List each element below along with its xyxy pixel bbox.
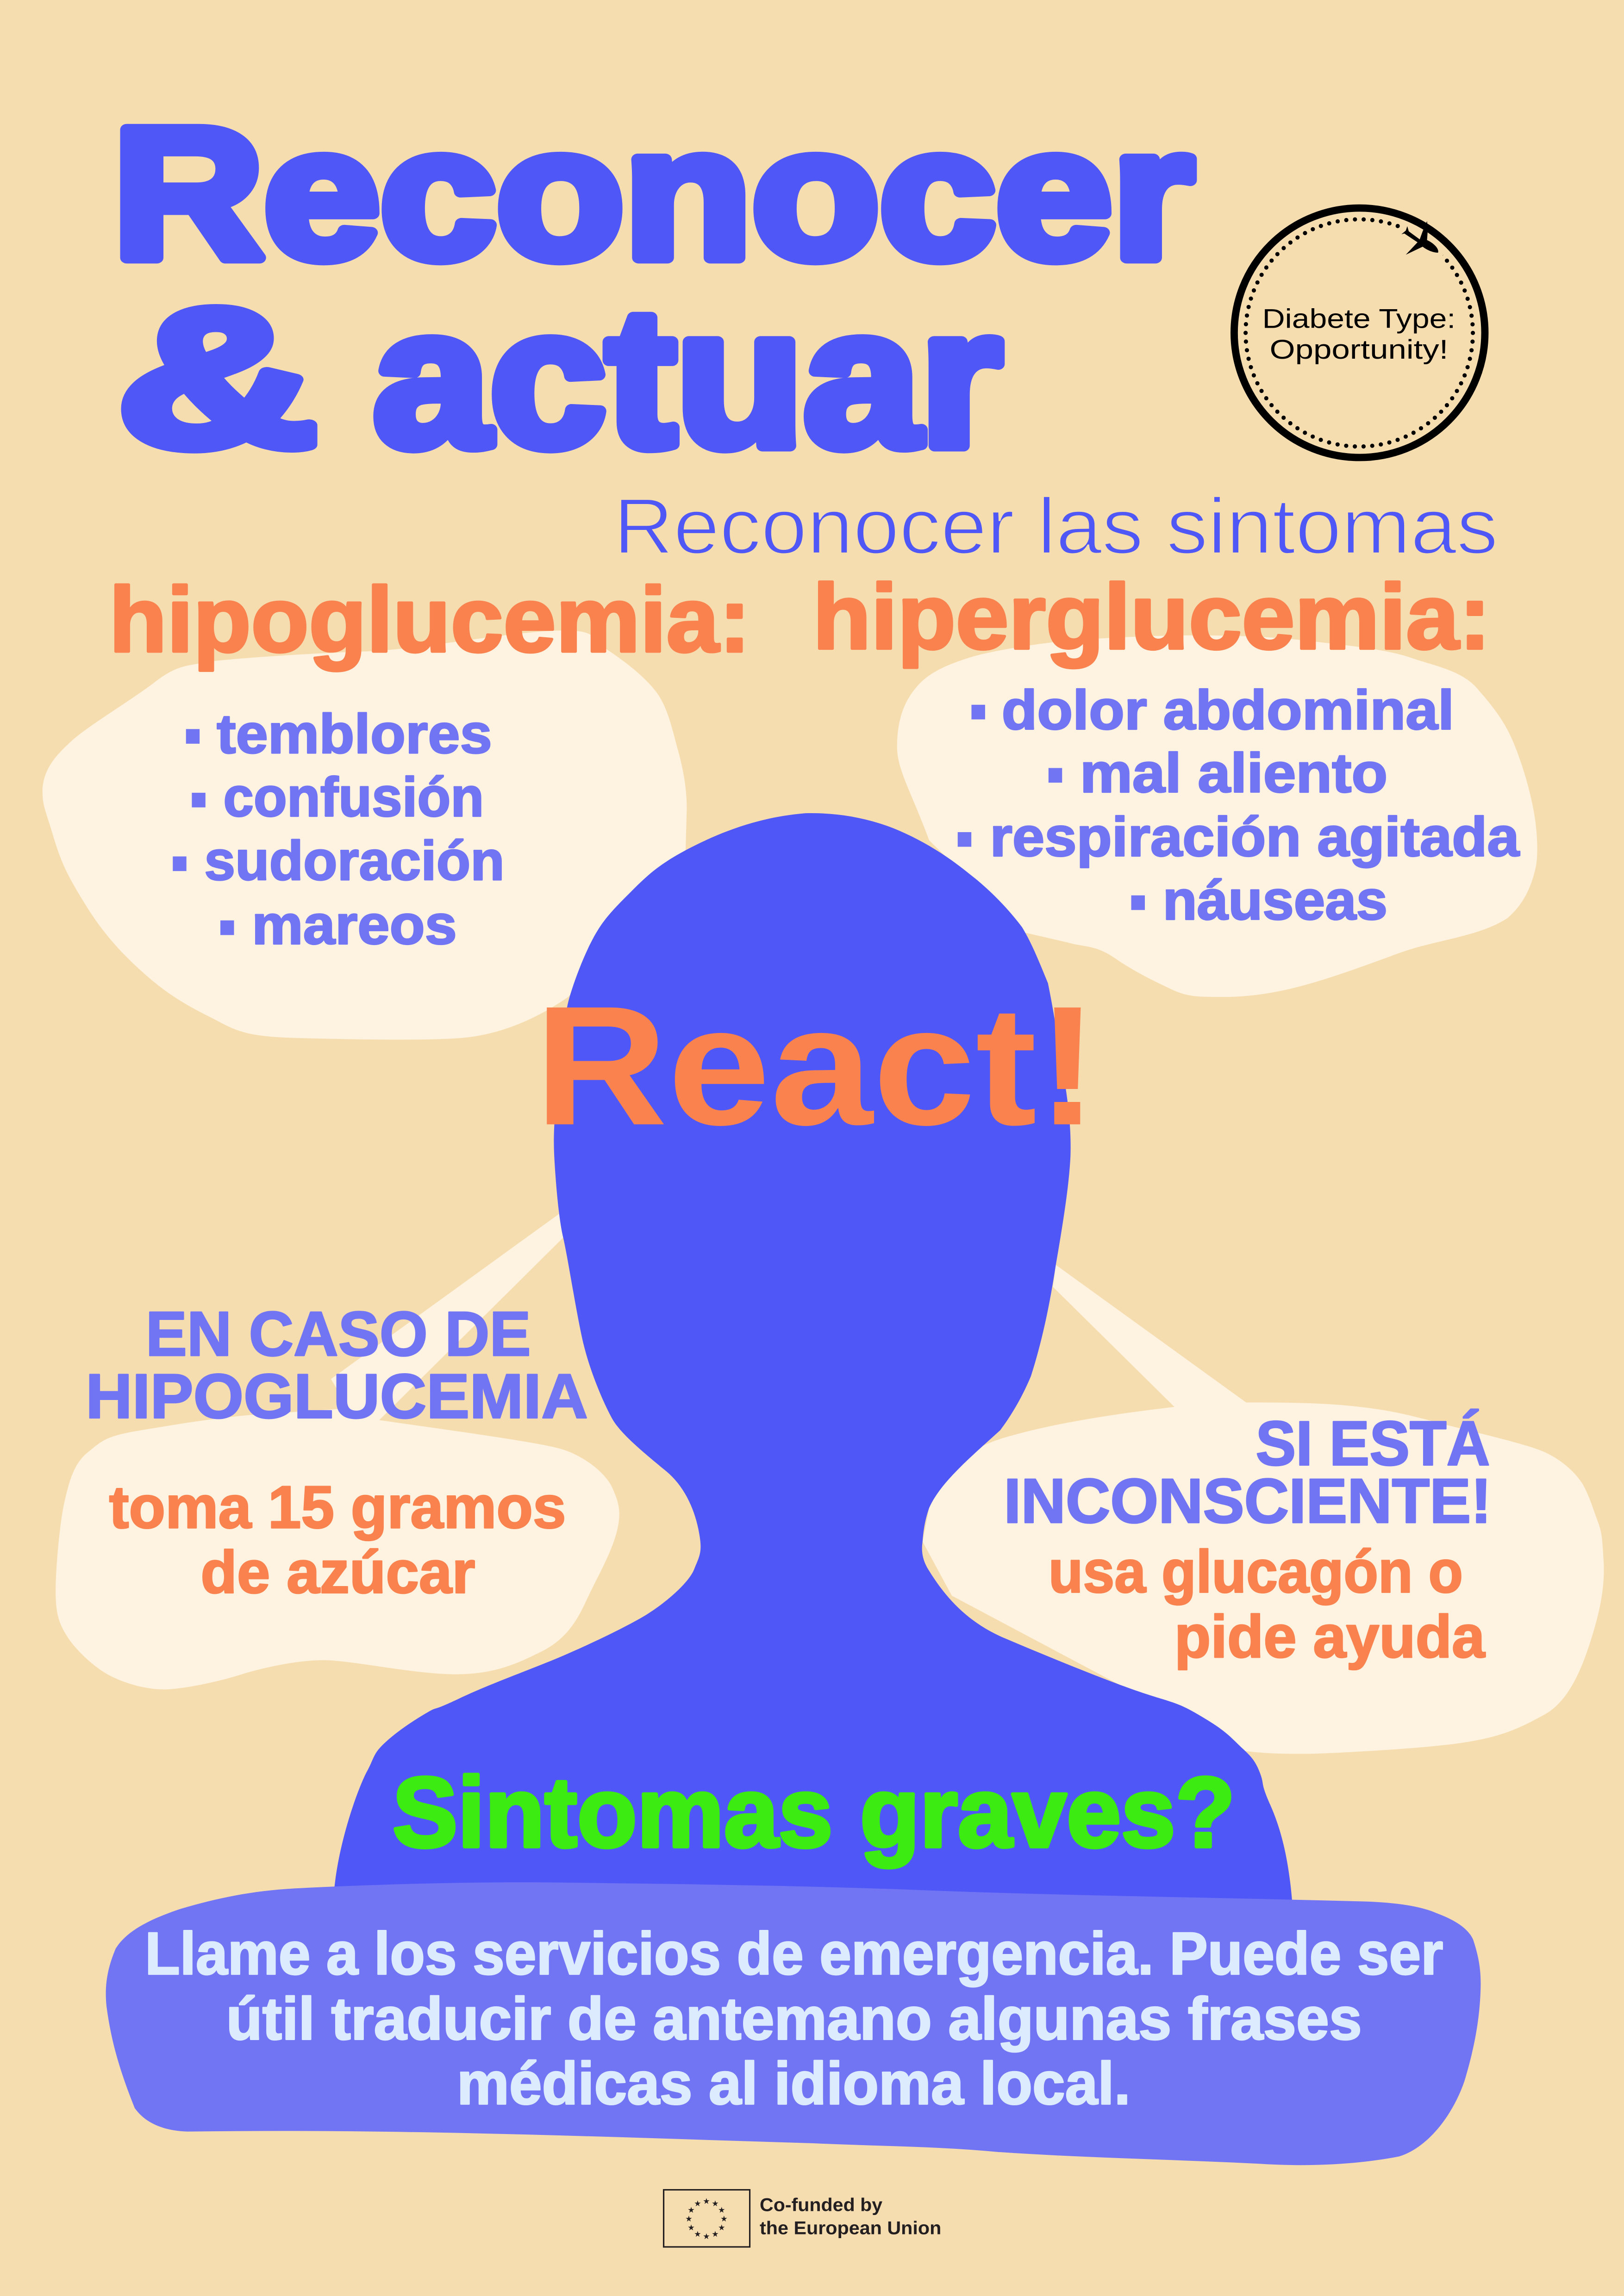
list: hiperglucemia symptoms: respiración agitada xyxy=(990,806,1520,868)
logo: EU flag and co-funded text: ★ xyxy=(718,2223,725,2233)
logo: EU flag and co-funded text: Co-funded by xyxy=(760,2195,883,2215)
list: hipoglucemia symptoms: mareos xyxy=(252,894,457,956)
list: hipoglucemia symptoms: temblores xyxy=(217,703,492,765)
heading: React: React! xyxy=(535,971,1098,1160)
list: hipoglucemia symptoms: sudoración xyxy=(204,830,505,892)
title: actuar xyxy=(374,268,1002,487)
text: emergency advice: médicas al idioma local. xyxy=(457,2050,1131,2117)
text: usa glucagon o pide ayuda xyxy=(1049,1538,1485,1670)
list: hiperglucemia symptoms xyxy=(958,679,1520,932)
title: & xyxy=(117,268,318,487)
logo: EU flag and co-funded text xyxy=(664,2190,941,2247)
badge text: Diabete Type: xyxy=(1262,304,1455,334)
text: toma 15 gramos de azucar xyxy=(109,1474,566,1606)
list: hiperglucemia symptoms: mal aliento xyxy=(1080,742,1387,804)
list: hiperglucemia symptoms: dolor abdominal xyxy=(1002,679,1454,741)
logo: EU flag and co-funded text: ★ xyxy=(685,2215,693,2224)
heading: si esta inconsciente xyxy=(1004,1408,1492,1536)
silhouette: person xyxy=(334,813,1292,1902)
badge text: Opportunity! xyxy=(1270,335,1448,365)
heading: hipoglucemia: hipoglucemia: xyxy=(109,569,750,672)
heading: sintomas graves: Sintomas graves? xyxy=(393,1756,1235,1868)
logo: EU flag and co-funded text: ★ xyxy=(687,2223,695,2233)
logo: EU flag and co-funded text: ★ xyxy=(687,2206,695,2215)
badge text xyxy=(1262,304,1455,365)
text: usa glucagon o pide ayuda: usa glucagón o xyxy=(1049,1538,1463,1605)
logo: EU flag and co-funded text: ★ xyxy=(703,2232,710,2241)
heading: si esta inconsciente: SI ESTÁ xyxy=(1255,1408,1490,1478)
logo: EU flag and co-funded text: ★ xyxy=(694,2199,701,2209)
text: toma 15 gramos de azucar: toma 15 gramos xyxy=(109,1474,566,1541)
text: emergency advice xyxy=(145,1921,1443,2117)
panel: en caso de hipoglucemia bubble xyxy=(56,1213,619,1689)
title xyxy=(113,90,1193,487)
logo: EU flag and co-funded text: ★ xyxy=(720,2215,728,2224)
logo: EU flag and co-funded text: ★ xyxy=(718,2206,725,2215)
text: toma 15 gramos de azucar: de azúcar xyxy=(200,1539,475,1606)
logo: EU flag and co-funded text: ★ xyxy=(712,2199,719,2209)
list: hiperglucemia symptoms: náuseas xyxy=(1163,870,1387,932)
heading: si esta inconsciente: INCONSCIENTE! xyxy=(1004,1466,1492,1536)
text: emergency advice: útil traducir de antemano algunas frases xyxy=(226,1985,1362,2052)
logo: EU flag and co-funded text: ★ xyxy=(703,2197,710,2206)
panel: hiperglucemia bubble xyxy=(897,635,1537,997)
badge: Diabete Type Opportunity xyxy=(1234,208,1485,458)
text: usa glucagon o pide ayuda: pide ayuda xyxy=(1174,1604,1485,1670)
text: emergency advice: Llame a los servicios de emergencia. Puede ser xyxy=(145,1921,1443,1987)
title: Reconocer xyxy=(113,90,1193,298)
list: hipoglucemia symptoms: confusión xyxy=(223,766,484,828)
panel: si esta inconsciente bubble xyxy=(923,1265,1604,1754)
heading: en caso de hipoglucemia: HIPOGLUCEMIA xyxy=(86,1361,588,1431)
logo: EU flag and co-funded text: ★ xyxy=(712,2230,719,2239)
logo: EU flag and co-funded text: the European Union xyxy=(760,2218,941,2239)
list: hipoglucemia symptoms xyxy=(173,703,505,956)
subtitle: Reconocer las sintomas xyxy=(613,482,1498,571)
panel: hipoglucemia bubble xyxy=(43,630,687,1039)
panel: emergency call bubble xyxy=(106,1882,1480,2165)
heading: hiperglucemia: hiperglucemia: xyxy=(813,566,1491,668)
logo: EU flag and co-funded text: ★ xyxy=(694,2230,701,2239)
heading: en caso de hipoglucemia xyxy=(86,1299,588,1431)
icon: airplane xyxy=(1401,221,1438,255)
heading: en caso de hipoglucemia: EN CASO DE xyxy=(146,1299,531,1369)
